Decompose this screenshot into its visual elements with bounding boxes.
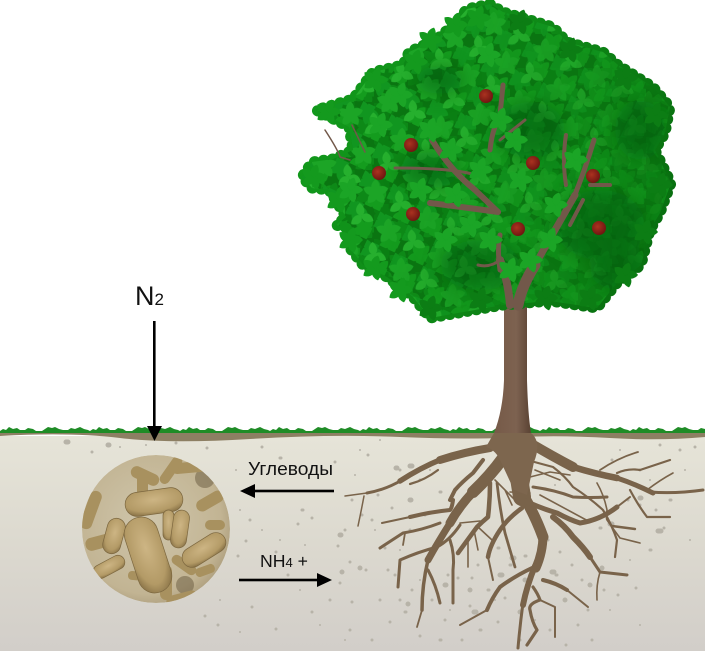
label: carbohydrates: Углеводы — [248, 459, 333, 479]
large lateral roots — [345, 443, 703, 627]
tree canopy — [290, 0, 690, 330]
arrow: carbohydrates to bacteria — [240, 484, 334, 498]
foreground rods — [91, 486, 230, 597]
tree roots — [345, 440, 703, 648]
tap root — [512, 440, 543, 648]
foliage textures — [310, 6, 670, 317]
secondary roots — [380, 452, 673, 645]
arrow: ammonium to roots — [239, 573, 332, 587]
apples — [372, 89, 606, 236]
trunk base below ground — [486, 433, 537, 495]
label: ammonium: NH4 + — [260, 551, 308, 571]
arrow: N2 into soil — [147, 321, 162, 441]
background shadows — [176, 470, 214, 593]
background rods — [79, 454, 226, 609]
foreground leaf clusters over branches — [337, 41, 588, 284]
foliage shadows — [400, 66, 665, 290]
grass strip — [0, 425, 705, 441]
tree branches — [325, 85, 610, 305]
soil background — [0, 436, 705, 651]
tree trunk — [494, 300, 531, 433]
bacteria circle — [79, 454, 230, 609]
N2 label: N2 — [135, 281, 164, 311]
edge leaf clusters — [300, 4, 491, 304]
soil specks — [66, 440, 695, 645]
